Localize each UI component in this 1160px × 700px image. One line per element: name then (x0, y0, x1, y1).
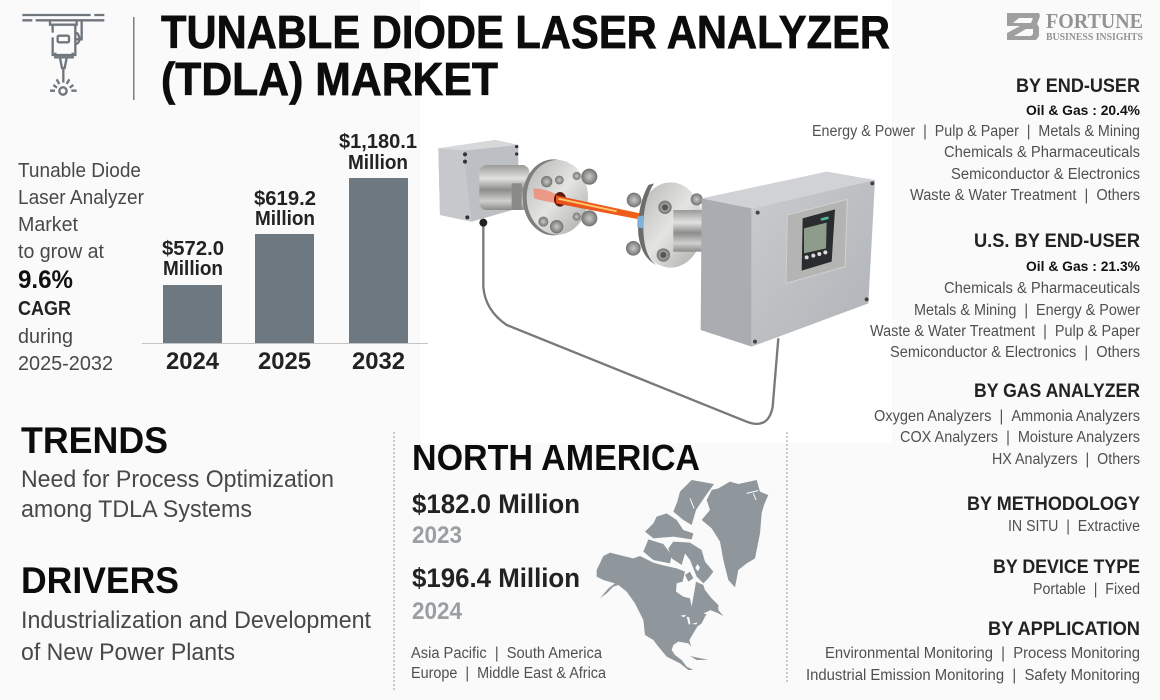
CAGR text block: Market (18, 214, 78, 236)
panel: North America: NORTH AMERICA (412, 437, 700, 478)
CAGR text block: CAGR (18, 298, 71, 320)
segment: U.S. by end-user: Oil & Gas : 21.3% (1026, 258, 1141, 274)
segment: by device type: Portable | Fixed (1033, 581, 1140, 598)
segment: by end-user: BY END-USER (1016, 75, 1140, 97)
title (161, 6, 890, 105)
drivers block: Industrialization and Development (21, 607, 371, 634)
CAGR text block: 2025-2032 (18, 353, 113, 375)
bar chart: $1,180.1 (339, 131, 417, 153)
trends block: Need for Process Optimization (21, 466, 334, 493)
segment: by device type (993, 556, 1140, 598)
segment: by end-user: Oil & Gas : 20.4% (1026, 102, 1141, 118)
CAGR text block: 9.6% (18, 266, 73, 294)
segment: U.S. by end-user: Metals & Mining | Energy & Power (914, 302, 1140, 319)
segment: U.S. by end-user: Chemicals & Pharmaceuticals (944, 280, 1140, 297)
trends block (21, 420, 334, 523)
CAGR text block: Tunable Diode (18, 160, 141, 182)
bar chart: $572.0 (162, 238, 224, 260)
segment: by gas analyzer: COX Analyzers | Moisture Analyzers (900, 429, 1140, 446)
panel: North America: $196.4 Million (412, 563, 580, 593)
right column: market segments (806, 75, 1141, 684)
trends block: TRENDS (21, 420, 168, 461)
bar chart: Million (255, 208, 315, 230)
trends block: among TDLA Systems (21, 496, 252, 523)
logo: Fortune Business Insights (1007, 9, 1143, 43)
segment: by gas analyzer: Oxygen Analyzers | Ammonia Analyzers (874, 408, 1140, 425)
segment: U.S. by end-user (870, 230, 1141, 361)
segment: by end-user: Waste & Water Treatment | Others (910, 187, 1140, 204)
map: North America (597, 480, 768, 670)
icon: laser cutting head (22, 15, 104, 95)
drivers block: DRIVERS (21, 560, 179, 601)
segment: U.S. by end-user: Waste & Water Treatment | Pulp & Paper (870, 323, 1140, 340)
segment: by methodology (967, 493, 1140, 535)
CAGR text block: Laser Analyzer (18, 187, 144, 209)
segment: by methodology: IN SITU | Extractive (1008, 518, 1140, 535)
panel: North America: 2023 (412, 522, 462, 549)
CAGR text block: during (18, 326, 73, 348)
segment: by application: Environmental Monitoring | Process Monitoring (825, 645, 1140, 662)
segment: by end-user (812, 75, 1141, 204)
segment: by end-user: Energy & Power | Pulp & Paper | Metals & Mining (812, 123, 1140, 140)
bar chart: $619.2 (254, 188, 316, 210)
segment: by end-user: Chemicals & Pharmaceuticals (944, 144, 1140, 161)
segment: by device type: BY DEVICE TYPE (993, 556, 1140, 578)
bar chart: 2025 (258, 348, 311, 375)
segment: by gas analyzer: BY GAS ANALYZER (974, 380, 1140, 402)
logo: Fortune Business Insights: BUSINESS INSIGHTS (1046, 32, 1143, 43)
logo: Fortune Business Insights: FORTUNE (1046, 9, 1143, 33)
segment: by application (806, 618, 1140, 684)
segment: by gas analyzer: HX Analyzers | Others (992, 451, 1140, 468)
CAGR text block: to grow at (18, 241, 104, 263)
panel: North America (411, 437, 700, 682)
drivers block (21, 560, 371, 666)
product photo: laser analyzer (438, 140, 875, 424)
drivers block: of New Power Plants (21, 639, 235, 666)
segment: by gas analyzer (874, 380, 1140, 468)
bar chart: 2024 (166, 348, 220, 375)
segment: U.S. by end-user: U.S. BY END-USER (974, 230, 1140, 252)
bar chart (142, 131, 428, 375)
segment: by end-user: Semiconductor & Electronics (951, 166, 1140, 183)
segment: by application: Industrial Emission Monitoring | Safety Monitoring (806, 667, 1140, 684)
segment: by application: BY APPLICATION (988, 618, 1140, 640)
bar chart: Million (163, 258, 223, 280)
panel: North America: 2024 (412, 598, 463, 625)
panel: North America: Europe | Middle East & Africa (411, 665, 606, 682)
panel: North America: Asia Pacific | South America (411, 645, 602, 662)
panel: North America: $182.0 Million (412, 489, 580, 519)
segment: by methodology: BY METHODOLOGY (967, 493, 1140, 515)
bar chart: 2032 (352, 348, 405, 375)
CAGR text block (18, 160, 144, 375)
title: (TDLA) MARKET (161, 53, 498, 105)
bar chart: Million (348, 152, 408, 174)
title: TUNABLE DIODE LASER ANALYZER (161, 6, 890, 58)
segment: U.S. by end-user: Semiconductor & Electronics | Others (890, 344, 1140, 361)
